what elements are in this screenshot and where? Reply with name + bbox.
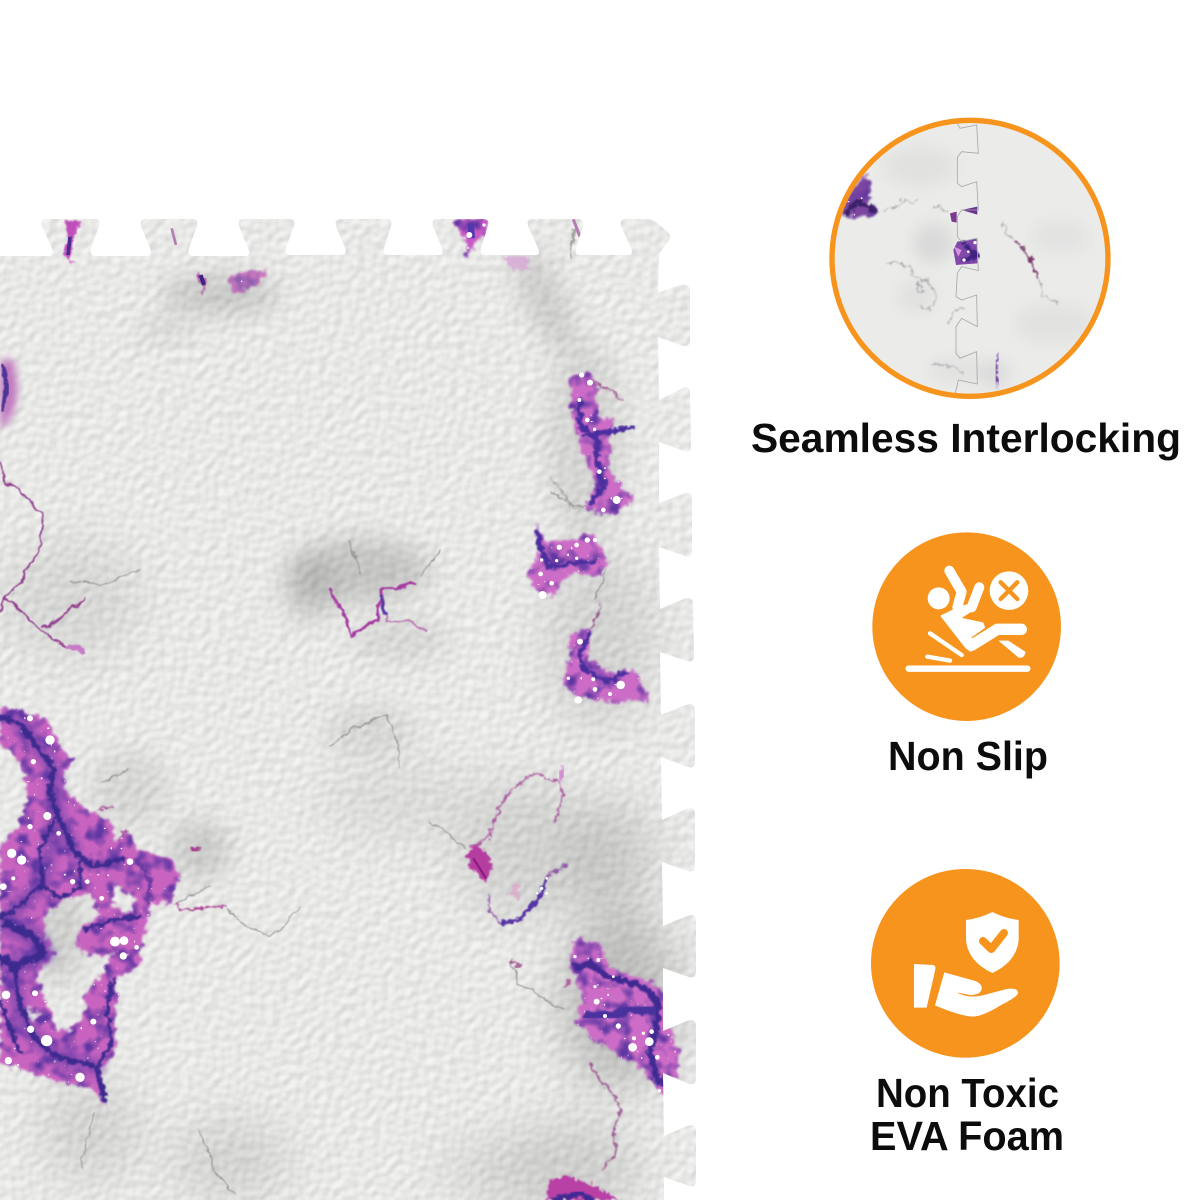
- purple patch: upper left edge: [0, 360, 18, 428]
- icon: hand holding shield: [871, 869, 1060, 1058]
- feature: non toxic eva foam: [870, 869, 1064, 1159]
- marble foam mat: [0, 210, 700, 1200]
- purple cluster: right column: [526, 372, 651, 704]
- purple veins: left edge: [0, 462, 85, 652]
- circular seam close-up: [827, 117, 1113, 403]
- mat grey smudges: [0, 239, 680, 1200]
- purple cluster: lower left: [0, 707, 227, 1107]
- purple cluster: lower right and looped vein: [467, 767, 681, 1200]
- feature: non slip: [872, 532, 1061, 779]
- label: seamless interlocking: Seamless Interlocking: [751, 415, 1181, 461]
- purple patches: top tabs: [63, 220, 268, 295]
- faint grey veins: [70, 230, 606, 1195]
- purple vein: center: [330, 584, 425, 636]
- interlocking seam line: [955, 123, 978, 393]
- embossed foam texture: [0, 210, 700, 1200]
- label: non toxic eva foam: Non Toxic: [876, 1070, 1059, 1116]
- label: non toxic eva foam: [870, 1070, 1064, 1159]
- label: non slip: Non Slip: [888, 733, 1048, 779]
- label: non toxic eva foam: EVA Foam: [870, 1113, 1064, 1159]
- feature: seamless interlocking: [751, 117, 1181, 461]
- icon: person slipping: [872, 532, 1061, 721]
